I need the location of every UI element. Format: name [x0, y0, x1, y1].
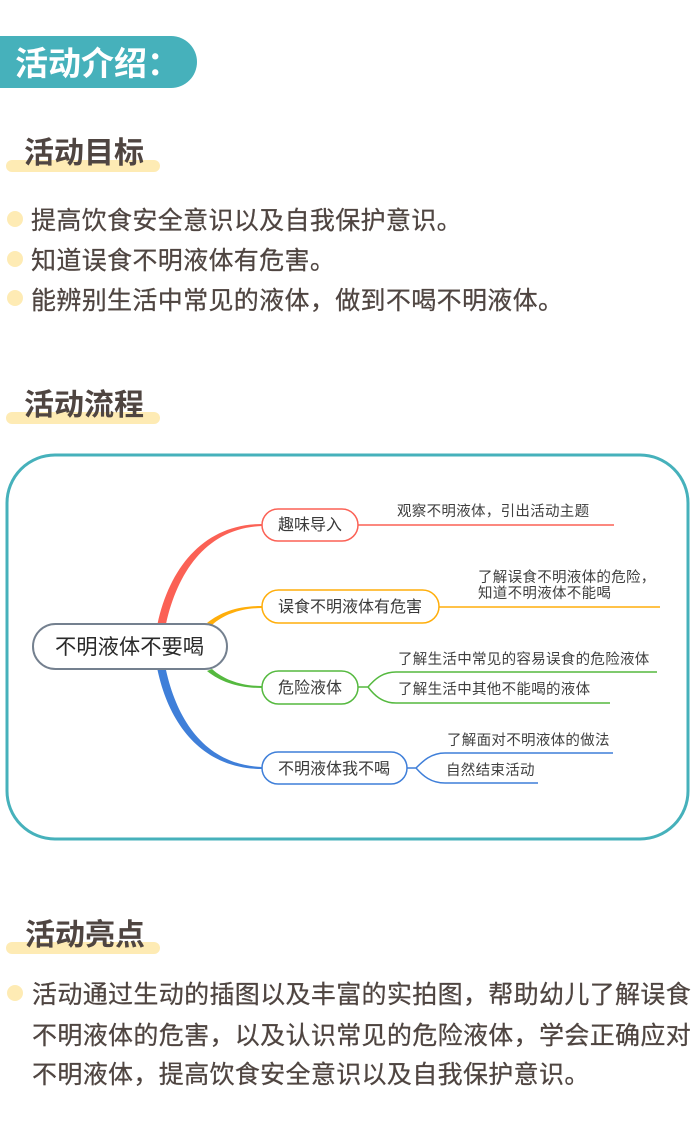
title: 活动介绍 — [0, 36, 197, 88]
text block: highlights: 不明液体，提高饮食安全意识以及自我保护意识。 — [32, 1061, 590, 1089]
heading: 活动目标: 活动目标 — [24, 137, 144, 170]
node: 误食不明液体有危害: 知道不明液体不能喝 — [478, 585, 611, 602]
text block: highlights: 活动通过生动的插图以及丰富的实拍图，帮助幼儿了解误食 — [32, 981, 691, 1009]
node: 误食不明液体有危害 — [262, 569, 660, 623]
title: 活动介绍: 活动介绍： — [15, 45, 180, 82]
node: 危险液体 — [262, 651, 657, 704]
node: 危险液体: 了解生活中常见的容易误食的危险液体 — [398, 651, 650, 668]
text block: highlights — [7, 981, 691, 1089]
node: center topic: 不明液体不要喝 — [55, 635, 204, 659]
node: 误食不明液体有危害: 了解误食不明液体的危险， — [478, 569, 656, 586]
branch: red connector — [158, 524, 262, 624]
node: 危险液体: 了解生活中其他不能喝的液体 — [398, 681, 591, 698]
text block: goals list: 知道误食不明液体有危害。 — [31, 247, 335, 275]
node: 不明液体我不喝: 了解面对不明液体的做法 — [447, 732, 610, 749]
node: 不明液体我不喝: 自然结束活动 — [446, 762, 535, 779]
text block: goals list: 能辨别生活中常见的液体，做到不喝不明液体。 — [31, 287, 563, 315]
node: center topic — [33, 624, 227, 669]
text block: goals list: 提高饮食安全意识以及自我保护意识。 — [31, 207, 462, 235]
node: 趣味导入 — [262, 502, 614, 541]
text block: goals list — [7, 207, 563, 315]
text block: highlights: 不明液体的危害，以及认识常见的危险液体，学会正确应对 — [32, 1022, 691, 1050]
node: 不明液体我不喝: 不明液体我不喝 — [278, 760, 390, 778]
heading: 活动亮点: 活动亮点 — [25, 919, 145, 952]
node: 误食不明液体有危害: 误食不明液体有危害 — [278, 598, 422, 616]
branch: blue connector — [158, 670, 262, 769]
heading: 活动流程: 活动流程 — [24, 389, 144, 422]
panel: mind map — [7, 455, 688, 839]
branch: orange connector — [207, 606, 262, 625]
node: 危险液体: 危险液体 — [278, 679, 342, 697]
node: 趣味导入: 趣味导入 — [278, 516, 342, 534]
node: 趣味导入: 观察不明液体，引出活动主题 — [397, 502, 589, 520]
node: 不明液体我不喝 — [262, 732, 613, 784]
branch: green connector — [207, 669, 262, 688]
